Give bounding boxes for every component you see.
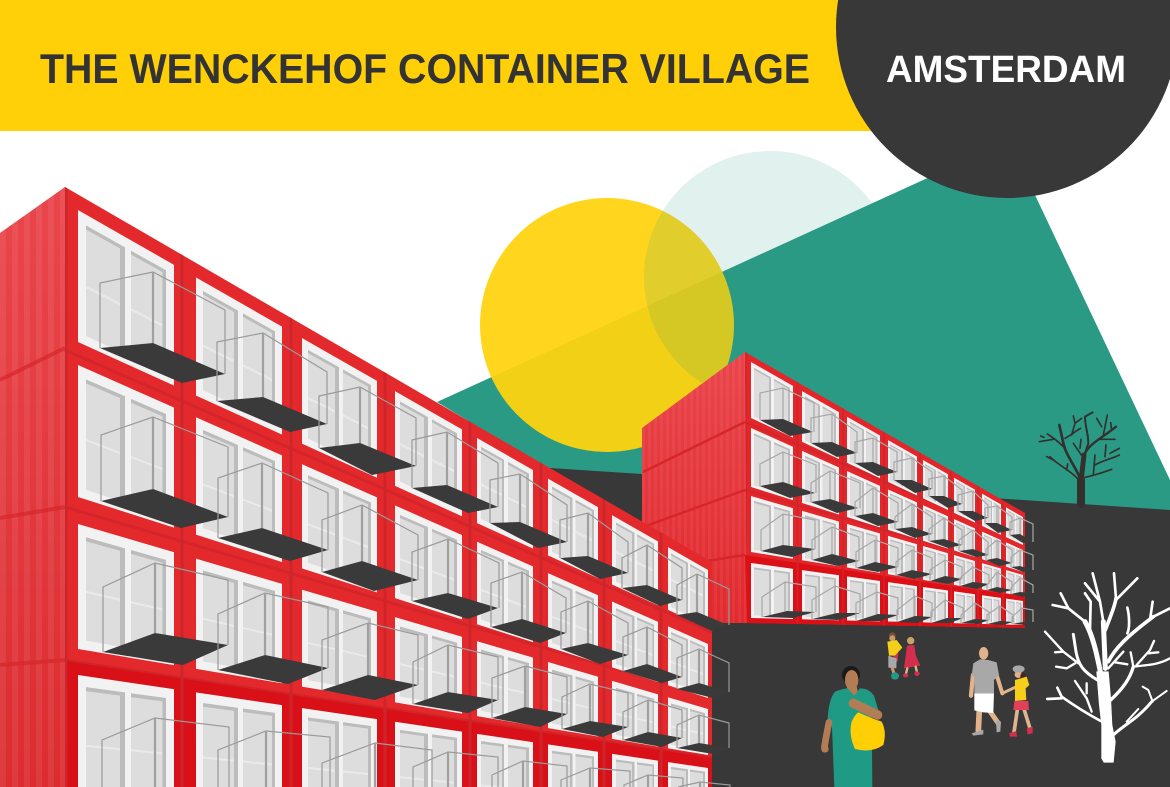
- left building railing back posts: [153, 272, 700, 787]
- right container building: [642, 340, 1033, 630]
- dark ground: [500, 468, 1170, 787]
- location label: AMSTERDAM: [886, 49, 1126, 91]
- dark location circle: [836, 0, 1170, 198]
- left building balconies row 1: [100, 343, 728, 631]
- people: man and child holding hands: [971, 647, 1033, 737]
- yellow sun circle: [480, 198, 734, 452]
- left building windows: [78, 210, 708, 787]
- icon: white bare tree: [1045, 573, 1170, 762]
- right building balconies row 2: [760, 482, 1033, 572]
- teal hill triangle: [437, 170, 1170, 520]
- people: woman with yellow bag: [821, 666, 885, 787]
- yellow title band: [0, 0, 900, 131]
- title: THE WENCKEHOF CONTAINER VILLAGE: [40, 45, 810, 92]
- people: two children: [887, 632, 920, 680]
- right building side face: [642, 352, 747, 623]
- left building balconies row 2: [101, 489, 729, 698]
- right building windows: [751, 362, 1023, 625]
- icon: dark bare tree: [1039, 412, 1119, 504]
- left container building: [0, 180, 730, 787]
- header banner: [0, 0, 1170, 198]
- right building glass railings: [760, 388, 1033, 624]
- left building side face: [0, 187, 65, 787]
- right building balconies row 3: [761, 545, 1033, 597]
- left building glass railings: [100, 272, 730, 787]
- right building front red wall: [745, 340, 1025, 630]
- left building front red wall: [65, 180, 712, 787]
- right building balconies row 1: [760, 419, 1033, 543]
- right building balconies row 4: [762, 611, 1033, 625]
- pale teal circle: [644, 151, 896, 403]
- left building balconies row 3: [103, 633, 729, 754]
